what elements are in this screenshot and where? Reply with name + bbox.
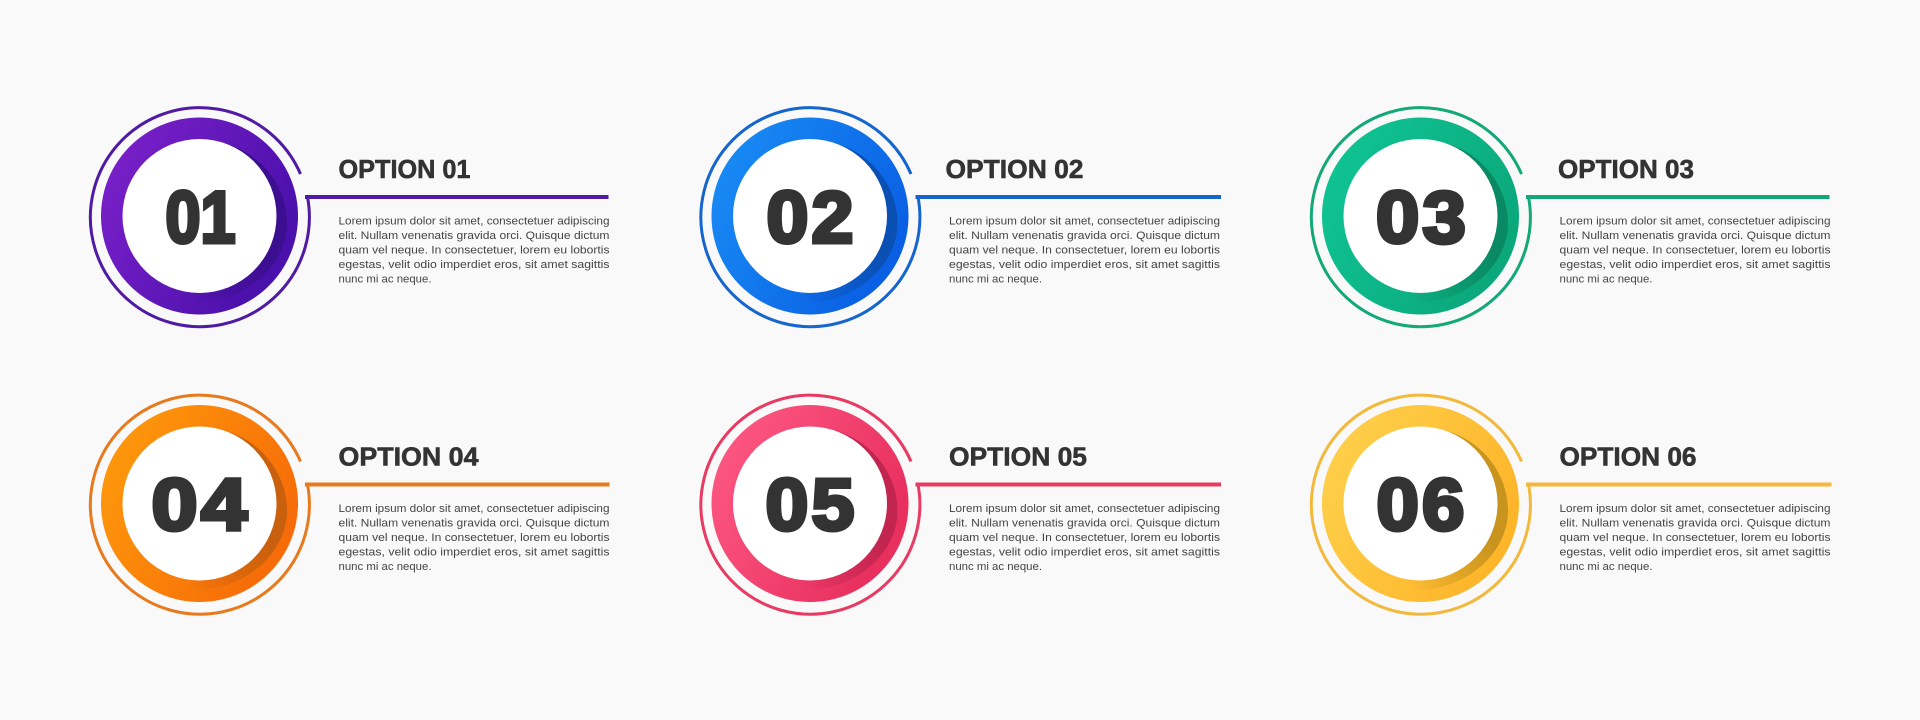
panel: option 02 — [701, 108, 1221, 327]
body text: Lorem ipsum dolor sit amet, consectetuer adipiscing — [338, 215, 610, 227]
body text: egestas, velit odio imperdiet eros, sit amet sagittis — [338, 259, 610, 271]
panel: option 04 — [90, 395, 610, 614]
outer arc and connector line — [701, 395, 1221, 614]
outer arc and connector line — [90, 108, 608, 327]
heading: OPTION 05 — [949, 442, 1087, 472]
outer arc and connector line — [1311, 108, 1830, 327]
number: 06 — [1376, 465, 1468, 546]
heading: OPTION 02 — [946, 154, 1084, 184]
ring — [101, 118, 298, 314]
body text: egestas, velit odio imperdiet eros, sit amet sagittis — [1560, 546, 1831, 558]
body text: elit. Nullam venenatis gravida orci. Quisque dictum — [949, 230, 1220, 242]
outer arc and connector line — [90, 395, 609, 614]
panel: option 01 — [90, 108, 610, 327]
body text: egestas, velit odio imperdiet eros, sit amet sagittis — [949, 546, 1221, 558]
body text: quam vel neque. In consectetuer, lorem eu lobortis — [949, 532, 1221, 544]
panel: option 06 — [1311, 395, 1832, 614]
body text: quam vel neque. In consectetuer, lorem eu lobortis — [1560, 244, 1831, 256]
body text: Lorem ipsum dolor sit amet, consectetuer adipiscing — [949, 215, 1220, 227]
body text: quam vel neque. In consectetuer, lorem eu lobortis — [949, 244, 1221, 256]
ring — [1322, 118, 1519, 314]
number: 04 — [152, 465, 250, 546]
body text — [1560, 503, 1831, 573]
heading: OPTION 01 — [338, 154, 470, 184]
body text — [1560, 215, 1831, 286]
body text: quam vel neque. In consectetuer, lorem eu lobortis — [338, 244, 610, 256]
heading: OPTION 06 — [1560, 442, 1696, 472]
body text: Lorem ipsum dolor sit amet, consectetuer adipiscing — [1560, 503, 1830, 515]
body text: elit. Nullam venenatis gravida orci. Quisque dictum — [949, 517, 1220, 529]
body text: quam vel neque. In consectetuer, lorem eu lobortis — [1560, 532, 1831, 544]
body text: nunc mi ac neque. — [338, 274, 432, 286]
body text: Lorem ipsum dolor sit amet, consectetuer adipiscing — [1560, 215, 1830, 227]
body text — [949, 215, 1221, 286]
body text: nunc mi ac neque. — [338, 561, 432, 573]
body text: egestas, velit odio imperdiet eros, sit amet sagittis — [1560, 259, 1831, 271]
panel: option 05 — [701, 395, 1221, 614]
body text: Lorem ipsum dolor sit amet, consectetuer adipiscing — [949, 503, 1220, 515]
body text: elit. Nullam venenatis gravida orci. Quisque dictum — [338, 517, 610, 529]
ring — [101, 405, 298, 602]
body text — [949, 503, 1221, 573]
number: 01 — [166, 178, 236, 258]
body text: elit. Nullam venenatis gravida orci. Quisque dictum — [1560, 517, 1830, 529]
outer arc and connector line — [1311, 395, 1832, 614]
body text: nunc mi ac neque. — [949, 561, 1042, 573]
body text: Lorem ipsum dolor sit amet, consectetuer adipiscing — [338, 503, 610, 515]
body text: egestas, velit odio imperdiet eros, sit amet sagittis — [338, 546, 610, 558]
ring — [1322, 405, 1519, 602]
outer arc and connector line — [701, 108, 1221, 327]
body text: quam vel neque. In consectetuer, lorem eu lobortis — [338, 532, 610, 544]
number: 05 — [766, 465, 858, 546]
body text: nunc mi ac neque. — [949, 274, 1042, 286]
heading: OPTION 03 — [1558, 154, 1694, 184]
body text: elit. Nullam venenatis gravida orci. Quisque dictum — [338, 230, 610, 242]
number: 03 — [1376, 178, 1469, 258]
ring — [712, 405, 908, 602]
heading: OPTION 04 — [338, 442, 479, 472]
body text: nunc mi ac neque. — [1560, 561, 1652, 573]
panel: option 03 — [1311, 108, 1831, 327]
body text — [338, 215, 610, 286]
body text: egestas, velit odio imperdiet eros, sit amet sagittis — [949, 259, 1221, 271]
body text — [338, 503, 610, 573]
ring — [712, 118, 908, 314]
body text: nunc mi ac neque. — [1560, 274, 1652, 286]
body text: elit. Nullam venenatis gravida orci. Quisque dictum — [1560, 230, 1830, 242]
number: 02 — [766, 178, 856, 258]
